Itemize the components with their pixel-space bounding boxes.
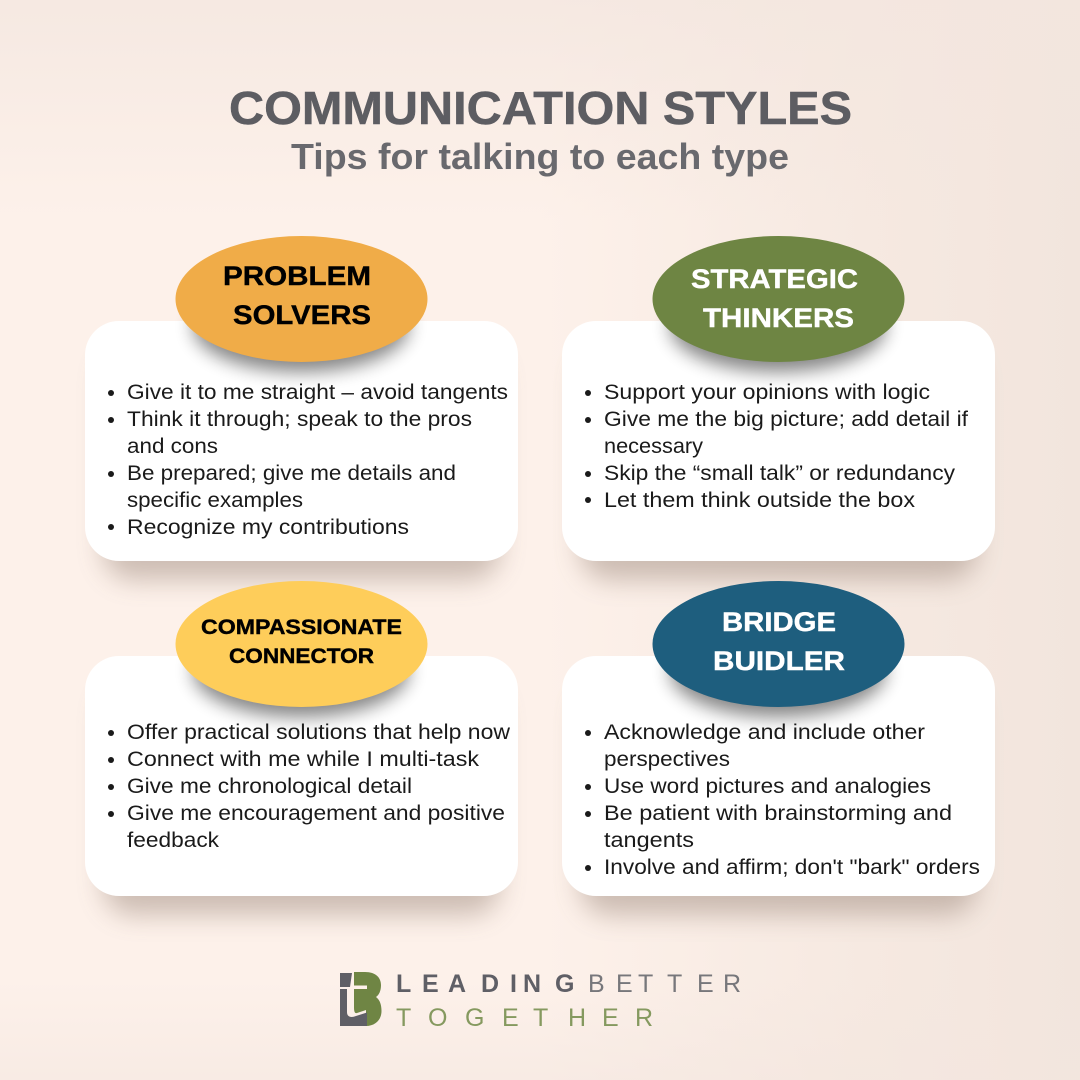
tips list: Acknowledge and include other	[604, 721, 925, 744]
wordmark	[396, 970, 741, 1032]
card	[562, 656, 995, 896]
heading	[223, 261, 371, 330]
badge	[652, 236, 904, 362]
heading	[713, 607, 845, 676]
tips list: Use word pictures and analogies	[604, 775, 931, 798]
tips list: Recognize my contributions	[127, 516, 409, 539]
wordmark: LEADING	[396, 970, 574, 998]
wordmark: TOGETHER	[396, 1004, 653, 1032]
panel: strategic thinkers	[562, 236, 995, 580]
tips list	[108, 721, 511, 852]
tips list: necessary	[604, 435, 704, 458]
heading: BUIDLER	[713, 646, 845, 676]
card	[85, 321, 518, 561]
tips list: specific examples	[127, 489, 303, 512]
wordmark: BETTER	[588, 970, 741, 998]
panel: problem solvers	[85, 236, 518, 580]
subtitle: Tips for talking to each type	[291, 136, 789, 177]
tips list: Support your opinions with logic	[604, 381, 930, 404]
heading: BRIDGE	[722, 607, 836, 637]
tips list: Think it through; speak to the pros	[127, 408, 472, 431]
badge	[176, 581, 428, 707]
panel: compassionate connector	[85, 581, 518, 915]
tips list: Give me the big picture; add detail if	[604, 408, 968, 431]
heading: PROBLEM	[223, 261, 371, 291]
tips list	[585, 721, 980, 879]
tips list: Give it to me straight – avoid tangents	[127, 381, 508, 404]
tips list: Give me encouragement and positive	[127, 802, 505, 825]
tips list: tangents	[604, 829, 694, 852]
tips list	[585, 381, 968, 512]
logo	[340, 970, 741, 1032]
tips list: Be patient with brainstorming and	[604, 802, 952, 825]
tips list: Connect with me while I multi-task	[127, 748, 480, 771]
card	[562, 321, 995, 561]
tips list: Offer practical solutions that help now	[127, 721, 511, 744]
tips list: feedback	[127, 829, 220, 852]
tips list: and cons	[127, 435, 218, 458]
tips list: Be prepared; give me details and	[127, 462, 456, 485]
tips list: Skip the “small talk” or redundancy	[604, 462, 956, 485]
tips list	[108, 381, 508, 539]
heading: STRATEGIC	[691, 264, 858, 294]
tips list: Give me chronological detail	[127, 775, 412, 798]
badge	[176, 236, 428, 362]
badge	[652, 581, 904, 707]
heading	[691, 264, 858, 333]
panel: bridge builder	[562, 581, 995, 915]
icon: logo mark	[340, 972, 382, 1026]
title: COMMUNICATION STYLES	[229, 82, 852, 134]
heading: THINKERS	[703, 303, 854, 333]
heading: SOLVERS	[233, 300, 371, 330]
heading: CONNECTOR	[229, 645, 374, 668]
heading	[201, 616, 402, 668]
tips list: Involve and affirm; don't "bark" orders	[604, 856, 980, 879]
tips list: perspectives	[604, 748, 730, 771]
card	[85, 656, 518, 896]
tips list: Let them think outside the box	[604, 489, 916, 512]
heading: COMPASSIONATE	[201, 616, 402, 639]
